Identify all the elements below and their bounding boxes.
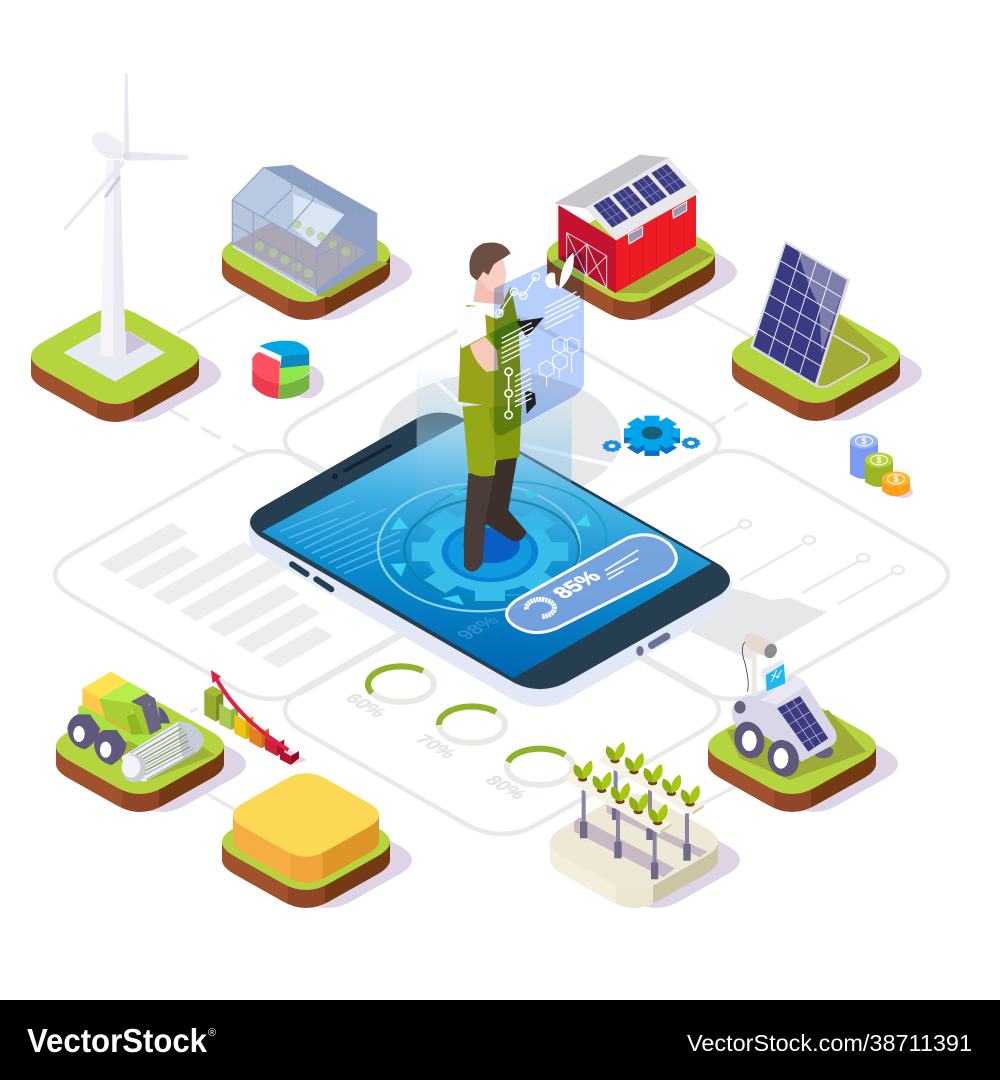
phone body [249, 522, 732, 707]
trend arrow [211, 670, 288, 750]
frame lines [232, 165, 377, 296]
footer url: VectorStock.com/38711391 [687, 1030, 972, 1056]
donut 80% [507, 749, 573, 785]
light beam [417, 367, 572, 530]
footer registered mark: ® [208, 1027, 216, 1039]
bar 6 [280, 749, 299, 765]
hologram rings [378, 482, 607, 611]
roof back slope [554, 155, 668, 208]
roof pane [232, 168, 345, 248]
hair [469, 242, 511, 281]
right boot [485, 457, 527, 541]
barn shadow [616, 247, 713, 293]
orange coins: $ [893, 474, 899, 484]
leaf icon [545, 253, 574, 290]
reel cap [122, 754, 146, 782]
big gear [624, 416, 680, 456]
robot drawing [727, 633, 867, 781]
reel slats [130, 724, 195, 779]
reel right shade [178, 722, 203, 760]
98% label: 98% [453, 613, 504, 643]
barn windows [628, 202, 687, 244]
percentage labels: 60% [340, 691, 391, 721]
pie chart icon [252, 341, 324, 399]
roof pane highlight [293, 194, 345, 248]
screen text lines [280, 501, 400, 573]
screen gear [412, 502, 568, 601]
panel shadow on tile [817, 315, 888, 388]
green slice [279, 365, 309, 399]
panel grid [759, 253, 841, 374]
seedlings [255, 219, 351, 278]
left boot [464, 472, 495, 572]
hay block [232, 773, 380, 883]
racks and seedlings [567, 742, 707, 879]
wall boards [630, 203, 683, 285]
shadow outline [817, 335, 869, 387]
holo node chain [505, 368, 512, 419]
donut 70% [439, 706, 505, 743]
footer bar [0, 1000, 1000, 1080]
coin stacks icon [850, 434, 913, 498]
back roof [263, 165, 377, 215]
small gear left [604, 441, 620, 451]
blades [63, 73, 188, 231]
trousers shading [488, 402, 522, 461]
hydroponic plant bed [550, 742, 740, 908]
donut 60% [368, 666, 434, 702]
blue slice [259, 341, 309, 368]
greenhouse shadow [317, 260, 388, 297]
earpiece [332, 446, 390, 480]
floor rim [232, 246, 317, 295]
bar 2 [219, 703, 238, 730]
base shadow [126, 330, 148, 355]
glove sleeve [488, 318, 523, 351]
red barn on tile [541, 155, 737, 334]
man [456, 242, 544, 572]
hologram panel [494, 251, 584, 435]
turbine base [63, 332, 165, 382]
badge spinner [526, 599, 554, 617]
solar panel on tile [726, 241, 922, 435]
bar 5 [265, 737, 284, 756]
rear wheel [67, 714, 100, 749]
robot on tile [702, 633, 898, 826]
front wheel [94, 730, 127, 765]
hexagon network [539, 337, 579, 387]
red slice [252, 352, 280, 399]
background panel: right circuit lines [514, 451, 948, 699]
ring arrows [391, 490, 591, 605]
wind turbine on tile [25, 73, 221, 436]
chassis [78, 693, 170, 748]
circuit nodes [700, 520, 904, 604]
overall bib [458, 287, 522, 407]
small gear right [683, 438, 699, 448]
phone screen [262, 422, 712, 678]
tower shaded side [113, 160, 126, 358]
long wall [232, 200, 317, 296]
roof solar panels [593, 164, 686, 228]
neck [473, 280, 505, 305]
hood [99, 682, 150, 703]
grain tank [82, 672, 128, 698]
percentage labels: 80% [480, 773, 531, 803]
green coins: $ [876, 455, 882, 465]
blue coins: $ [861, 436, 867, 446]
far wheel [158, 707, 170, 723]
graph chain [496, 273, 540, 317]
arm [470, 337, 498, 372]
badge value: 85% [547, 567, 606, 602]
panel cells [753, 244, 847, 383]
background panel: left bar chart [55, 451, 489, 699]
roof front slope [585, 157, 699, 241]
hay block on tile [222, 773, 412, 908]
sleeve [456, 306, 487, 348]
tower [100, 160, 126, 357]
pointing hand [517, 317, 544, 337]
bar 4 [249, 726, 269, 748]
smartphone [249, 242, 732, 707]
greenhouse on tile [216, 165, 412, 334]
holo text lines [502, 292, 580, 407]
panel glare [798, 251, 847, 353]
trousers [463, 402, 522, 477]
background panel: bottom donut charts [285, 586, 719, 834]
man shadow on the ground [690, 588, 828, 660]
badge lines [605, 550, 638, 579]
footer brand: VectorStock [27, 1022, 208, 1059]
side buttons [292, 564, 331, 589]
harvester shadow [100, 737, 215, 782]
gears icon [604, 416, 699, 456]
hub [122, 152, 131, 160]
nacelle [92, 132, 123, 159]
orange strip [105, 718, 133, 734]
floor [232, 210, 367, 290]
shirt collar [472, 301, 505, 319]
percentage labels: 70% [410, 732, 461, 762]
percentage labels [340, 691, 531, 803]
barn doors [567, 233, 607, 288]
left panel bars [98, 523, 334, 668]
bar 1 [204, 686, 223, 722]
bar chart with red trend arrow [204, 670, 307, 765]
header reel [122, 722, 203, 782]
panel frame [750, 241, 850, 387]
face [475, 257, 507, 293]
connector lines [170, 290, 755, 810]
charging port [636, 636, 667, 656]
other hand [525, 390, 536, 414]
harvester on tile [50, 672, 246, 826]
bar 3 [234, 714, 253, 739]
barn front wall [558, 205, 616, 293]
barn side wall [616, 195, 696, 293]
tower band [105, 177, 120, 197]
background panel: top pie [285, 316, 719, 564]
gable end [317, 213, 377, 296]
cab [129, 704, 150, 735]
phone face [250, 412, 730, 689]
85% badge [507, 535, 676, 640]
